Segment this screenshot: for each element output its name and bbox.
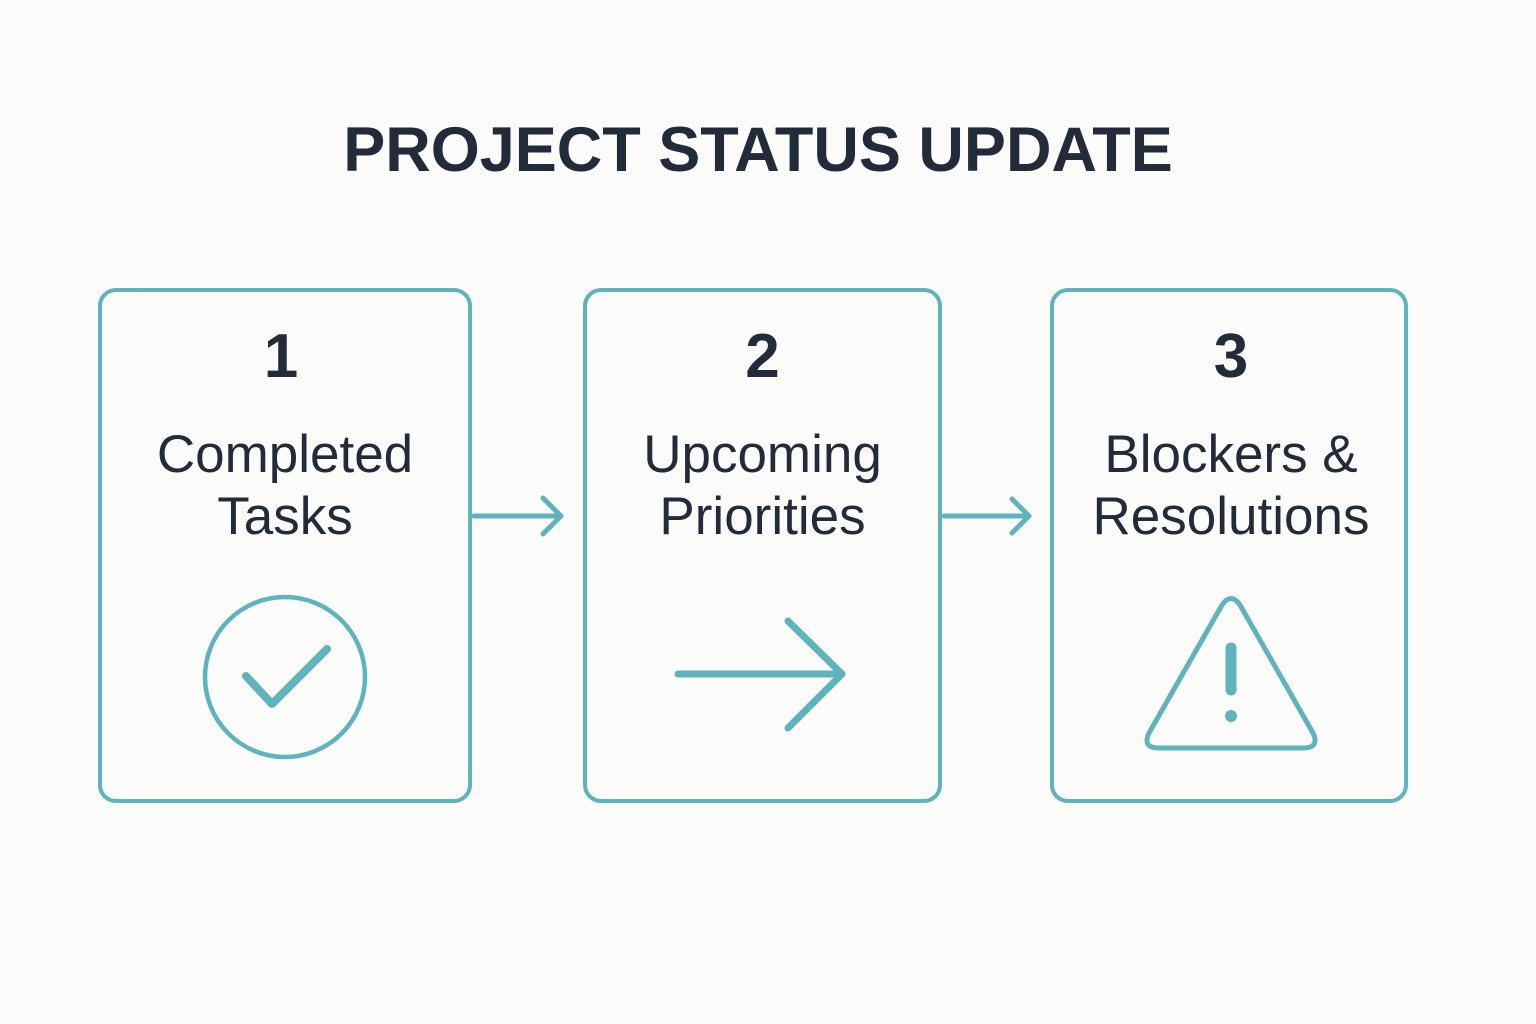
title: PROJECT STATUS UPDATE [343,115,1173,185]
label: blockers & resolutions: Resolutions [1093,487,1369,546]
label: blockers & resolutions [1093,425,1369,546]
label: completed tasks: Completed [157,425,413,484]
panel: blockers [1050,288,1408,803]
label: upcoming priorities [643,425,882,546]
panel: upcoming priorities [583,288,942,803]
icon: check circle [205,597,365,757]
label: upcoming priorities: Upcoming [643,425,882,484]
number 2: 2 [745,322,780,391]
icon: warning triangle [1147,598,1315,748]
icon: right arrow [678,621,842,728]
arrow: 1 to 2 [474,498,561,534]
label: blockers & resolutions: Blockers & [1104,425,1358,484]
arrow: 2 to 3 [944,499,1029,533]
panel: completed tasks [98,288,472,803]
label: upcoming priorities: Priorities [659,487,866,546]
number 1: 1 [264,322,298,391]
label: completed tasks: Tasks [217,487,353,546]
label: completed tasks [157,425,413,546]
number 3: 3 [1214,322,1248,391]
